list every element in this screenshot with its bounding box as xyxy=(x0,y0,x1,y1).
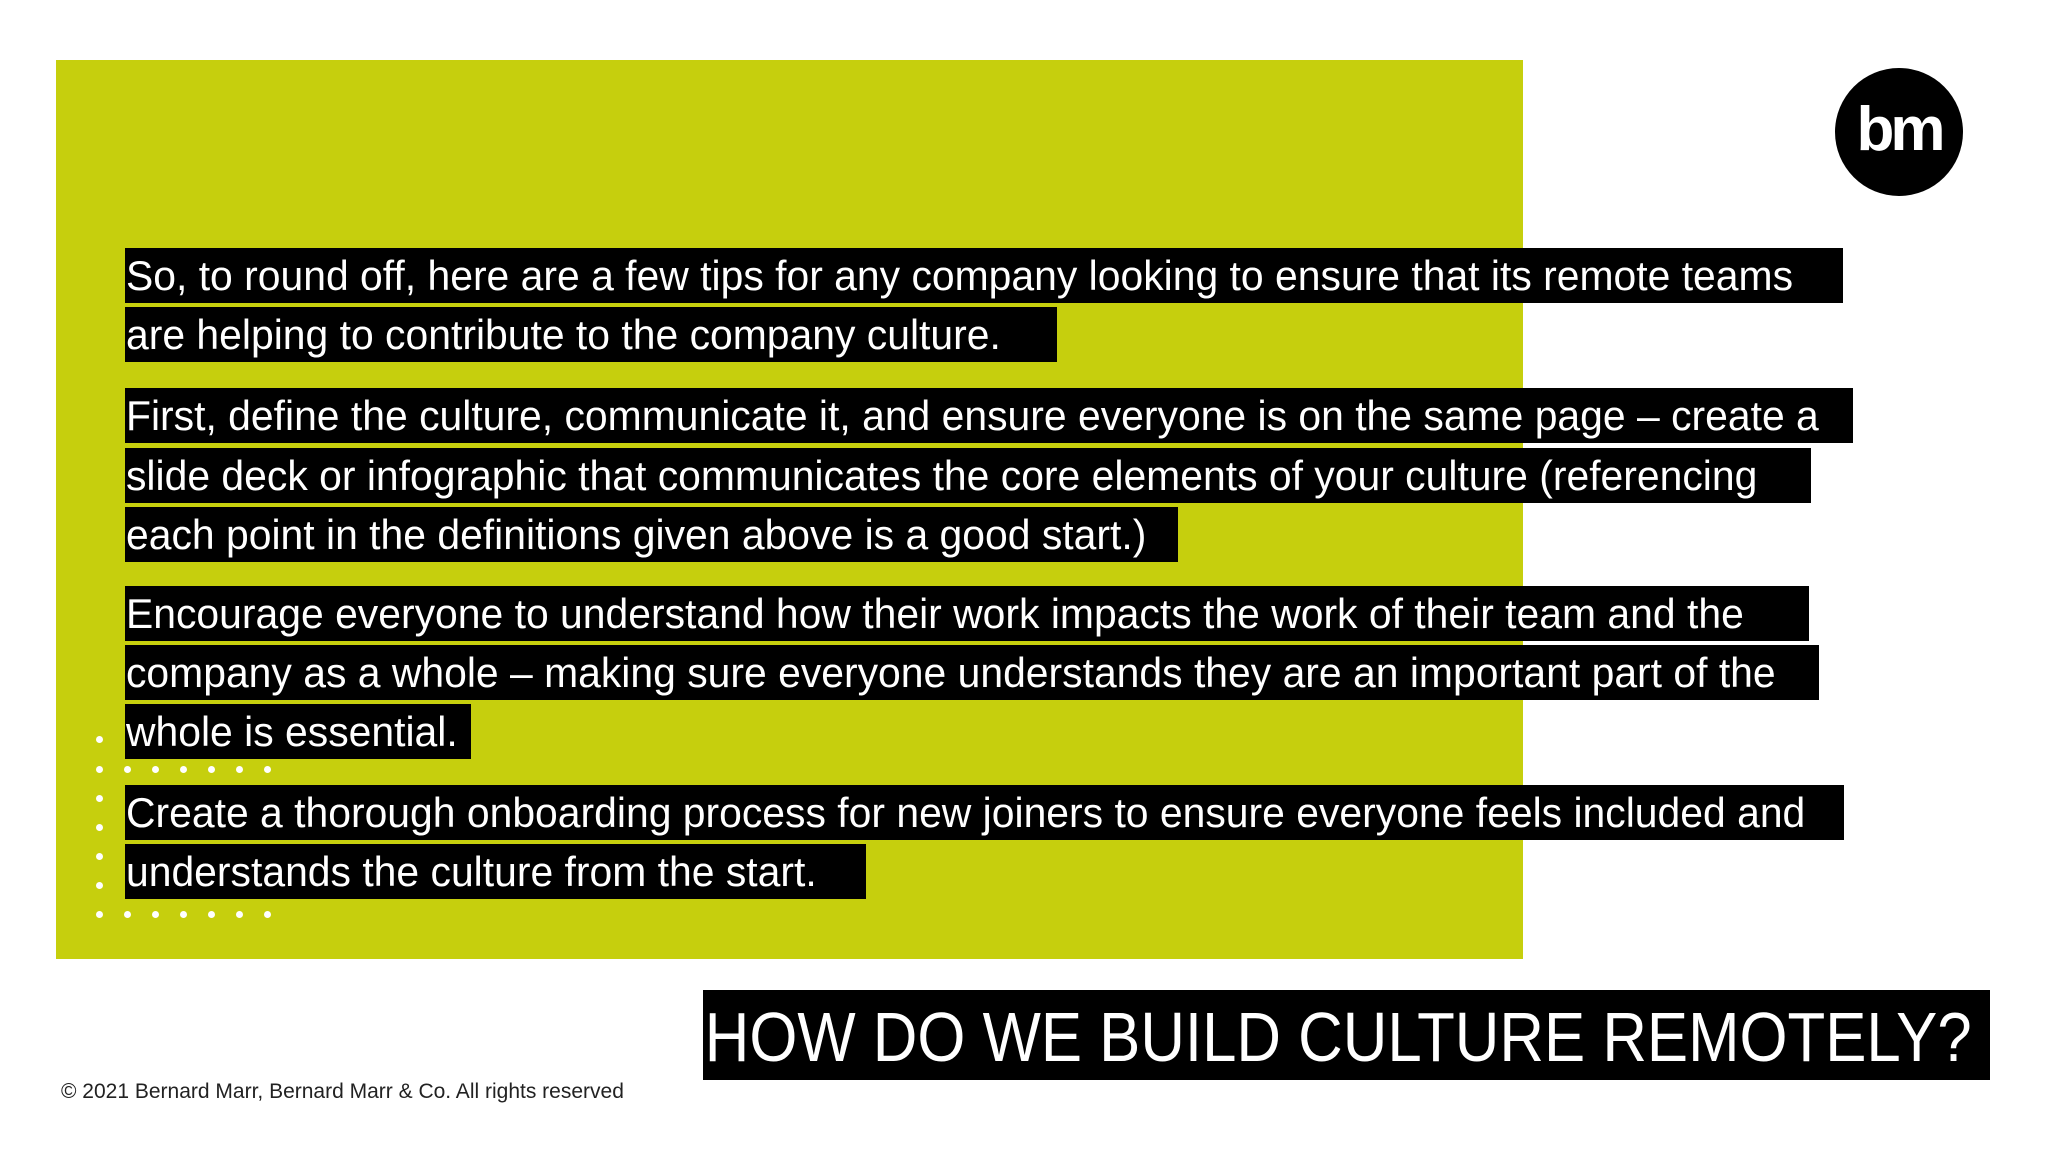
text: are helping to contribute to the company culture. xyxy=(126,311,1001,358)
title: HOW DO WE BUILD CULTURE REMOTELY? xyxy=(705,998,1972,1076)
text: company as a whole – making sure everyone understands they are an important part of the xyxy=(126,649,1776,696)
text: So, to round off, here are a few tips for any company looking to ensure that its remote teams xyxy=(126,252,1793,299)
logo: bm xyxy=(1835,68,1963,196)
text: First, define the culture, communicate it, and ensure everyone is on the same page – create a xyxy=(126,392,1819,439)
copyright footer: © 2021 Bernard Marr, Bernard Marr & Co. All rights reserved xyxy=(61,1080,624,1103)
text block: intro xyxy=(125,248,1843,362)
green panel xyxy=(56,60,1523,959)
text: Create a thorough onboarding process for new joiners to ensure everyone feels included and xyxy=(126,789,1805,836)
text: slide deck or infographic that communicates the core elements of your culture (referencing xyxy=(126,452,1757,499)
text block: tip 1 xyxy=(125,388,1853,562)
text block: tip 2 xyxy=(125,586,1819,759)
text: Encourage everyone to understand how their work impacts the work of their team and the xyxy=(126,590,1744,637)
text: each point in the definitions given above is a good start.) xyxy=(126,511,1146,558)
text: understands the culture from the start. xyxy=(126,848,817,895)
logo: bm: bm xyxy=(1856,95,1942,164)
text: whole is essential. xyxy=(126,708,458,755)
text block: tip 3 xyxy=(125,785,1844,899)
decorative dot pattern xyxy=(96,736,271,918)
